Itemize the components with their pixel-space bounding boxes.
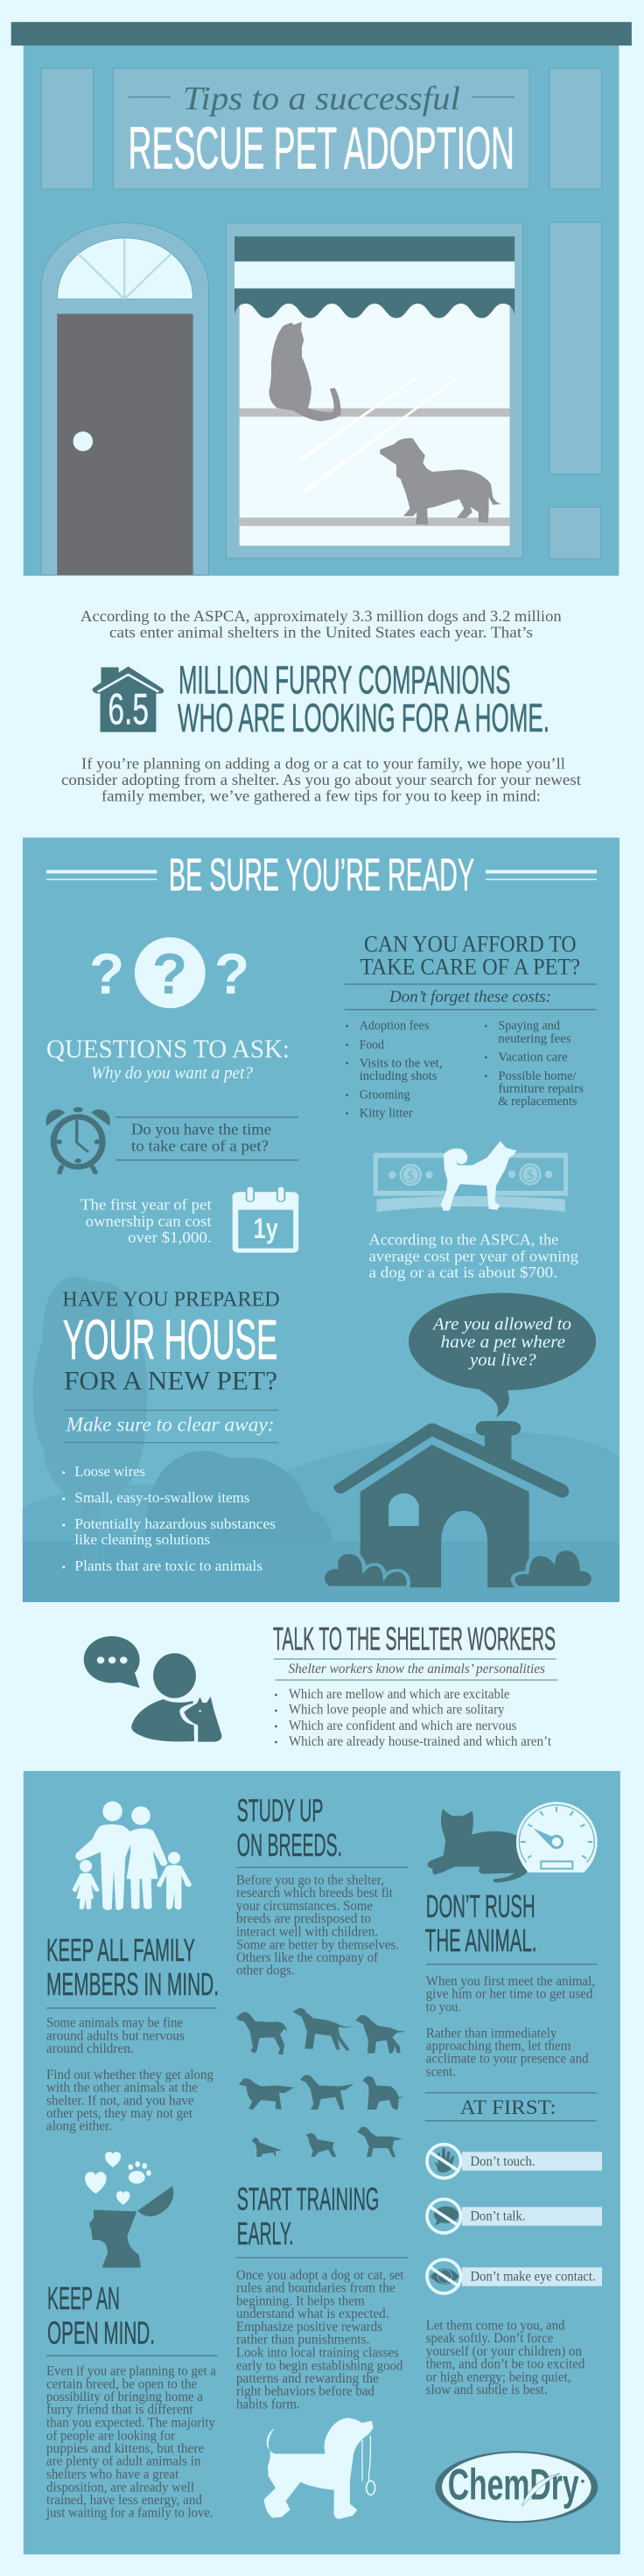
icon: puppy with leash <box>264 2418 375 2519</box>
text: open mind: puppies and kittens, but there <box>46 2441 204 2456</box>
average cost text <box>369 1231 578 1281</box>
text: study breeds: other dogs. <box>236 1964 295 1978</box>
logo: Chem-Dry <box>435 2451 598 2523</box>
text: open mind: furry friend that is different <box>46 2403 193 2418</box>
text: family members: Some animals may be fine <box>46 2016 183 2031</box>
text: don't rush: acclimate to your presence and <box>426 2052 589 2067</box>
heading: questions to ask <box>46 1034 290 1082</box>
icon: calendar 1y <box>233 1186 298 1253</box>
text: start training: right behaviors before bad <box>236 2384 374 2399</box>
text: start training: habits form. <box>236 2398 300 2412</box>
heading: questions to ask: Why do you want a pet? <box>91 1064 253 1082</box>
panel: upper right <box>550 68 602 189</box>
tip: don't make eye contact <box>427 2259 602 2293</box>
list: animal personalities <box>275 1687 552 1749</box>
text: let them come to you: yourself (or your children) on <box>426 2344 582 2359</box>
heading: study up on breeds <box>236 1793 408 1867</box>
tip: don't touch: Don’t touch. <box>471 2154 536 2169</box>
icon: money and dog: $ <box>407 1169 414 1184</box>
icon: cat with speedometer <box>428 1802 598 1883</box>
list: costs: & replacements <box>498 1095 578 1109</box>
heading: can you afford: Don’t forget these costs: <box>388 988 551 1006</box>
text: don't rush: approaching them, let them <box>426 2039 570 2054</box>
title: Tips to a successful <box>183 80 460 117</box>
icon: house with 6.5 <box>93 667 164 734</box>
heading: can you afford: CAN YOU AFFORD TO <box>364 932 577 957</box>
panel: be sure you're ready <box>23 837 620 1602</box>
intro text: According to the ASPCA, approximately 3.3 million dogs and 3.2 million <box>80 607 562 625</box>
icon: house <box>322 1421 593 1587</box>
tip: don't touch <box>427 2145 602 2178</box>
list: costs: including shots <box>360 1069 438 1083</box>
text: start training: Once you adopt a dog or cat, set <box>236 2268 404 2283</box>
heading: don't rush the animal: THE ANIMAL. <box>425 1922 537 1958</box>
text: open mind: of people are looking for <box>46 2428 176 2443</box>
first year cost text: ownership can cost <box>86 1212 212 1229</box>
callout: speech bubble: have a pet where <box>441 1334 565 1352</box>
text: don't rush: Rather than immediately <box>426 2026 557 2040</box>
text: family members: along either. <box>46 2119 112 2134</box>
shop window <box>227 223 523 558</box>
icon: money and dog <box>374 1141 568 1212</box>
heading: study up on breeds: STUDY UP <box>237 1793 323 1829</box>
heading: have you prepared your house: FOR A NEW PET? <box>64 1365 277 1396</box>
callout: speech bubble: you live? <box>468 1352 536 1370</box>
icon: question marks: ? <box>89 942 124 1006</box>
icon: money and dog: $ <box>527 1168 534 1183</box>
intro paragraph: If you’re planning on adding a dog or a cat to your family, we hope you’ll <box>81 754 565 772</box>
text: start training: patterns and rewarding the <box>236 2371 379 2386</box>
text: family members: around children. <box>46 2041 134 2056</box>
text: open mind: just waiting for a family to love. <box>46 2506 214 2521</box>
icon: person with dog talking <box>84 1636 221 1742</box>
building wall <box>24 46 619 576</box>
heading: can you afford: TAKE CARE OF A PET? <box>360 955 580 980</box>
callout: speech bubble: Are you allowed to <box>431 1315 571 1334</box>
text: family members: Find out whether they get along <box>46 2068 214 2082</box>
list: costs: Grooming <box>360 1088 410 1102</box>
list: clear away: Plants that are toxic to animals <box>74 1558 262 1574</box>
text: open mind: Even if you are planning to get a <box>46 2364 216 2379</box>
text: let them come to you: Let them come to you, and <box>426 2318 565 2333</box>
heading: have you prepared your house <box>62 1288 280 1443</box>
text: let them come to you <box>426 2318 585 2398</box>
panel: tall right <box>550 222 602 474</box>
tip: don't talk: Don’t talk. <box>471 2208 525 2223</box>
text: start training: rules and boundaries from the <box>236 2281 396 2296</box>
list: costs: Possible home/ <box>498 1069 577 1083</box>
average cost text: a dog or a cat is about $700. <box>369 1264 557 1281</box>
icon: cat silhouette <box>269 322 341 421</box>
text: study breeds: research which breeds best fit <box>236 1886 394 1900</box>
first year cost text <box>80 1196 212 1246</box>
text: open mind: than you expected. The majority <box>46 2416 215 2431</box>
heading: study up on breeds: ON BREEDS. <box>237 1827 342 1863</box>
text: study breeds: Some are better by themselves. <box>236 1937 399 1952</box>
heading: keep an open mind: KEEP AN <box>47 2280 120 2316</box>
intro paragraph: consider adopting from a shelter. As you go about your search for your newest <box>61 771 581 788</box>
average cost text: average cost per year of owning <box>369 1247 578 1264</box>
icon: dachshund silhouette <box>380 438 502 524</box>
list: costs: Visits to the vet, <box>360 1056 443 1070</box>
heading: million furry companions <box>178 657 550 740</box>
background landscape <box>23 1277 620 1602</box>
list: clear away: Potentially hazardous substances <box>74 1516 276 1532</box>
list: animal personalities: Which are already house-trained and which aren’t <box>289 1734 552 1749</box>
text: study breeds <box>236 1872 399 1978</box>
panel: upper left <box>41 68 94 189</box>
text: study breeds: Others like the company of <box>236 1950 379 1965</box>
heading: don't rush the animal: DON’T RUSH <box>426 1888 536 1924</box>
heading: keep an open mind <box>46 2280 217 2356</box>
heading: start training early: START TRAINING <box>237 2181 379 2217</box>
heading: have you prepared your house: YOUR HOUSE <box>63 1308 277 1371</box>
text: study breeds: Before you go to the shelter, <box>236 1872 384 1887</box>
text: don't rush: to you. <box>426 1999 461 2014</box>
text: let them come to you: speak softly. Don’t force <box>426 2331 553 2346</box>
panel: small right <box>550 507 601 559</box>
icon: question marks: ? <box>152 942 187 1006</box>
callout: time question: to take care of a pet? <box>131 1137 269 1154</box>
logo: Chem-Dry: ChemDry <box>448 2460 579 2510</box>
text: don't rush <box>426 1974 595 2079</box>
tip: don't make eye contact: Don’t make eye contact. <box>471 2270 596 2285</box>
heading: questions to ask: QUESTIONS TO ASK: <box>46 1034 290 1063</box>
heading: at first: AT FIRST: <box>460 2096 556 2119</box>
callout: time question: Do you have the time <box>131 1121 271 1138</box>
icon: house with 6.5: 6.5 <box>108 685 149 734</box>
list: animal personalities: Which are mellow and which are excitable <box>289 1687 510 1702</box>
heading: have you prepared your house: Make sure to clear away: <box>66 1414 275 1437</box>
callout: speech bubble <box>409 1293 596 1418</box>
icon: open mind head with hearts <box>85 2152 173 2268</box>
list: costs: Vacation care <box>498 1051 568 1065</box>
heading: talk to the shelter workers: Shelter workers know the animals’ personalities <box>289 1662 545 1676</box>
intro text <box>80 607 562 641</box>
list: costs: Adoption fees <box>360 1019 430 1033</box>
heading: keep all family members in mind: MEMBERS IN MIND. <box>46 1966 219 2002</box>
list: clear away: Loose wires <box>74 1463 145 1480</box>
list: costs: Kitty litter <box>360 1107 413 1121</box>
text: family members <box>46 2016 214 2134</box>
icon: calendar 1y: 1y <box>254 1213 278 1244</box>
icon: dog breeds <box>236 2008 406 2158</box>
text: let them come to you: them, and don’t be too excited <box>426 2357 585 2372</box>
text: family members: shelter. If not, and you have <box>46 2093 194 2108</box>
list: costs: furniture repairs <box>498 1082 584 1096</box>
intro text: cats enter animal shelters in the United States each year. That’s <box>109 624 533 641</box>
text: start training: rather than punishments. <box>236 2333 369 2348</box>
icon: question marks: ? <box>214 942 249 1006</box>
list: animal personalities: Which are confident and which are nervous <box>289 1718 516 1733</box>
average cost text: According to the ASPCA, the <box>369 1231 558 1249</box>
text: family members: other pets, they may not get <box>46 2106 193 2121</box>
text: start training: understand what is expected. <box>236 2306 388 2321</box>
text: let them come to you: slow and subtle is best. <box>426 2383 548 2398</box>
list: costs: neutering fees <box>498 1032 571 1046</box>
text: start training: Look into local training classes <box>236 2346 399 2361</box>
heading: keep an open mind: OPEN MIND. <box>47 2314 155 2350</box>
text: family members: with the other animals at the <box>46 2081 198 2096</box>
text: study breeds: your circumstances. Some <box>236 1899 373 1914</box>
heading: can you afford <box>345 932 597 1010</box>
first year cost text: The first year of pet <box>80 1196 212 1214</box>
heading: don't rush the animal <box>425 1888 597 1964</box>
heading: keep all family members in mind: KEEP ALL FAMILY <box>46 1932 195 1968</box>
panel: sign board <box>114 68 529 189</box>
heading: talk to the shelter workers <box>273 1621 558 1680</box>
door with arched frame <box>41 223 208 575</box>
text: don't rush: scent. <box>426 2064 456 2079</box>
heading: have you prepared your house: HAVE YOU PREPARED <box>62 1288 280 1311</box>
title <box>128 80 514 182</box>
icon: family <box>73 1802 192 1910</box>
tip: don't talk <box>427 2199 602 2233</box>
text: open mind: shelters who have a great <box>46 2468 179 2482</box>
storefront illustration <box>11 22 632 576</box>
text: family members: around adults but nervous <box>46 2028 185 2043</box>
heading: start training early: EARLY. <box>237 2216 294 2251</box>
text: start training: beginning. It helps them <box>236 2293 365 2308</box>
text: don't rush: When you first meet the animal, <box>426 1974 595 1989</box>
text: let them come to you: or high energy; being quiet, <box>426 2370 570 2384</box>
text: start training: Emphasize positive rewards <box>236 2320 382 2334</box>
text: study breeds: breeds are predisposed to <box>236 1912 371 1927</box>
text: start training <box>236 2268 404 2412</box>
text: don't rush: give him or her time to get used <box>426 1987 593 2002</box>
list: costs: Food <box>360 1038 384 1052</box>
heading: keep all family members in mind <box>46 1932 219 2008</box>
list: clear away: like cleaning solutions <box>74 1531 210 1548</box>
panel: tips <box>24 1771 620 2554</box>
text: open mind: disposition, are already well <box>46 2480 194 2495</box>
list: clear away <box>62 1463 276 1574</box>
intro paragraph: family member, we’ve gathered a few tips for you to keep in mind: <box>102 788 541 805</box>
list: costs <box>346 1019 584 1121</box>
callout: time question <box>116 1117 298 1160</box>
icon: alarm clock <box>46 1107 110 1172</box>
window glare <box>300 369 464 493</box>
roof <box>11 22 632 46</box>
text: open mind: are plenty of adult animals in <box>46 2454 201 2469</box>
text: start training: early to begin establishing good <box>236 2358 403 2373</box>
list: costs: Spaying and <box>498 1019 560 1033</box>
heading: start training early <box>236 2181 408 2258</box>
text: open mind: certain breed, be open to the <box>46 2376 197 2391</box>
list: animal personalities: Which love people and which are solitary <box>289 1703 505 1718</box>
icon: question marks <box>89 937 249 1008</box>
text: open mind: trained, have less energy, and <box>46 2493 202 2508</box>
text: study breeds: interact well with children. <box>236 1925 378 1940</box>
text: open mind: possibility of bringing home a <box>46 2390 203 2404</box>
first year cost text: over $1,000. <box>128 1228 212 1246</box>
text: open mind <box>46 2364 216 2521</box>
list: clear away: Small, easy-to-swallow items <box>74 1489 249 1506</box>
intro paragraph <box>61 754 581 805</box>
